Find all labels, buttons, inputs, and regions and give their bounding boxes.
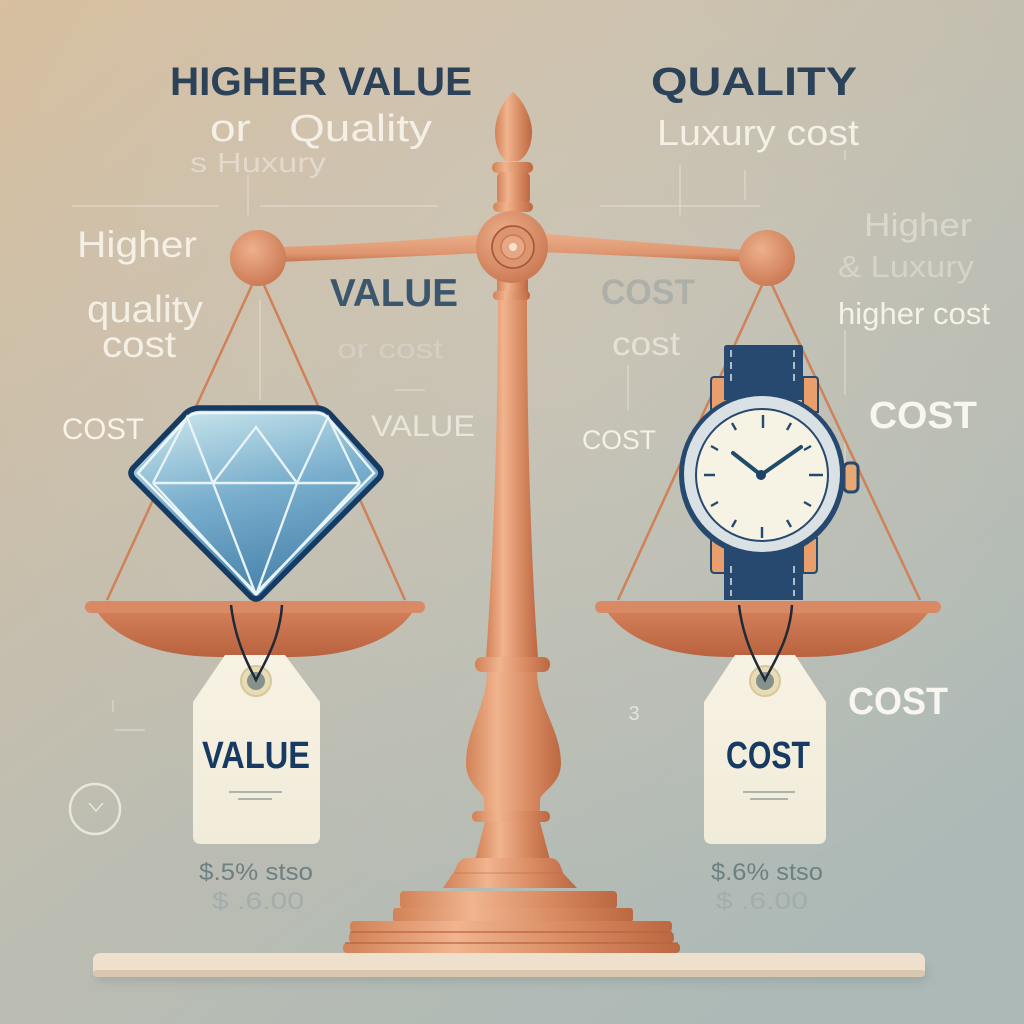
right pan: [595, 601, 941, 657]
centre hub: [476, 211, 548, 283]
right price tag: [704, 605, 826, 844]
shelf: [93, 953, 928, 982]
right side labels: [838, 207, 990, 723]
icon: faded mark: 3: [628, 703, 640, 725]
watch crown: [844, 463, 858, 492]
faded text: luxury: s Huxury: [190, 147, 326, 178]
icon: diamond: [131, 408, 381, 599]
tag label: VALUE: [202, 735, 310, 777]
left price tag: [193, 605, 320, 844]
watch strap: [724, 345, 803, 400]
scale: [85, 92, 941, 953]
right strings: [618, 285, 920, 600]
faded label: and luxury: & Luxury: [838, 249, 975, 284]
label: COST small: COST: [582, 425, 656, 455]
label: quality: quality: [87, 289, 203, 331]
icon: faded clock circle: [70, 784, 120, 834]
label: higher cost: higher cost: [838, 296, 990, 331]
centre right labels: [582, 273, 695, 455]
faded price line: $ .6.00: [716, 888, 808, 915]
right beam ball: [739, 230, 795, 286]
watch hands: [733, 447, 801, 475]
tag string: [739, 605, 792, 680]
centre left labels: [330, 272, 475, 443]
left prices: [199, 859, 313, 915]
tag label: COST: [726, 735, 810, 777]
label: COST large: COST: [869, 395, 977, 437]
watch case: [679, 392, 845, 558]
stepped base: [343, 891, 680, 953]
label: VALUE: VALUE: [330, 272, 458, 315]
label: VALUE small: VALUE: [371, 410, 475, 443]
price line: $.5% stso: [199, 859, 313, 886]
right prices: [711, 859, 823, 915]
faded label: COST: COST: [601, 273, 695, 312]
left strings: [107, 285, 405, 600]
label: COST lower: COST: [848, 681, 948, 723]
watch face: [696, 409, 828, 541]
faded label: or cost: or cost: [337, 334, 444, 364]
left pan: [85, 601, 425, 657]
label: higher: Higher: [77, 224, 197, 265]
faded label: higher: Higher: [864, 207, 972, 243]
faded price line: $ .6.00: [212, 888, 304, 915]
heading: quality: QUALITY: [651, 60, 857, 104]
heading: higher value: HIGHER VALUE: [170, 60, 472, 104]
watch ticks: [704, 415, 823, 538]
label: cost: cost: [102, 324, 177, 365]
finial and post: [443, 92, 577, 888]
price line: $.6% stso: [711, 859, 823, 886]
left beam ball: [230, 230, 286, 286]
faded divider lines: [72, 150, 845, 730]
heading: luxury cost: Luxury cost: [657, 112, 859, 153]
watch lugs: [711, 377, 818, 573]
icon: watch: [679, 345, 858, 600]
tag string: [231, 605, 282, 680]
scale beam: [278, 234, 485, 262]
heading: or quality: or Quality: [210, 108, 432, 150]
label: COST: COST: [62, 413, 144, 446]
left side labels: [62, 224, 203, 446]
label: cost: cost: [612, 325, 680, 362]
